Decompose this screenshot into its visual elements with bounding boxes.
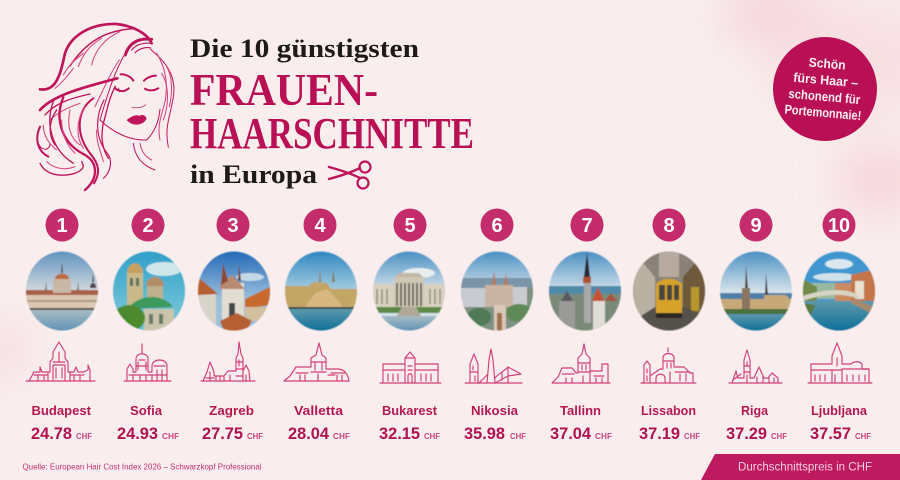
city label: Ljubljana: CHF <box>855 432 871 441</box>
photo: Riga <box>720 251 792 331</box>
skyline: Ljubljana <box>808 343 872 383</box>
city label: Bukarest: Bukarest <box>382 403 438 418</box>
callout bubble: schonend für <box>788 86 861 107</box>
city label: Tallinn <box>550 403 612 443</box>
city label: Ljubljana <box>810 403 871 443</box>
rank badge row: 2 <box>142 215 154 237</box>
city label: Bukarest: CHF <box>424 432 440 441</box>
city label: Riga <box>726 403 787 443</box>
skyline: Riga <box>729 350 782 383</box>
city label: Riga: CHF <box>771 432 787 441</box>
skyline: Budapest <box>26 342 95 381</box>
city label: Nikosia <box>464 403 526 443</box>
photo: Tallinn <box>549 251 621 331</box>
city label: Valletta: CHF <box>333 432 350 441</box>
city label: Lissabon: 37.19 <box>639 424 680 443</box>
city label: Budapest: Budapest <box>32 403 92 418</box>
skyline: Nikosia <box>465 349 522 383</box>
rank badge row <box>46 208 856 242</box>
icon: woman with flowing hair <box>37 22 177 192</box>
skyline: Zagreb <box>201 342 255 381</box>
city label: Nikosia: CHF <box>510 432 526 441</box>
city label: Ljubljana: Ljubljana <box>811 403 868 418</box>
title line 2: FRAUEN- <box>190 64 378 115</box>
title <box>190 34 474 189</box>
rank badge row: 5 <box>404 215 416 237</box>
photo: Nikosia <box>461 251 533 331</box>
city label: Bukarest <box>379 403 440 443</box>
photo: Lissabon <box>633 251 705 331</box>
city label: Budapest: 24.78 <box>31 424 72 443</box>
skyline: Bukarest <box>380 352 441 383</box>
photo: Budapest <box>26 251 98 331</box>
city label: Tallinn: Tallinn <box>560 403 601 418</box>
city label: Tallinn: CHF <box>595 432 612 441</box>
footer ribbon <box>701 454 900 480</box>
rank badge row: 9 <box>750 215 762 237</box>
photo: Ljubljana <box>803 251 875 331</box>
rank badge row: 7 <box>581 215 593 237</box>
city label: Ljubljana: 37.57 <box>810 424 851 443</box>
city label: Budapest: CHF <box>76 432 92 441</box>
skyline: Sofia <box>124 344 171 381</box>
rank badge row: 3 <box>227 215 239 237</box>
title line 3: HAARSCHNITTE <box>190 109 474 158</box>
city label: Budapest <box>31 403 92 443</box>
city label: Sofia: Sofia <box>130 403 163 418</box>
city label: Zagreb: 27.75 <box>202 424 243 443</box>
city label: Valletta <box>288 403 350 443</box>
callout bubble: Schön <box>808 55 846 73</box>
rank badge row: 8 <box>663 215 675 237</box>
footer ribbon: Durchschnittspreis in CHF <box>738 462 872 474</box>
city label: Lissabon: Lissabon <box>641 403 696 418</box>
rank badge row: 4 <box>314 215 326 237</box>
city label: Zagreb: Zagreb <box>209 403 254 418</box>
rank badge row: 10 <box>828 215 850 237</box>
skyline: Valletta <box>284 343 349 381</box>
callout bubble: fürs Haar – <box>793 70 859 90</box>
city label: Riga: Riga <box>741 403 769 418</box>
city label: Nikosia: Nikosia <box>471 403 519 418</box>
callout bubble <box>773 37 877 141</box>
city label: Lissabon: CHF <box>684 432 700 441</box>
title line 4: in Europa <box>190 160 317 189</box>
city label: Zagreb <box>202 403 263 443</box>
photo: Valletta <box>285 251 357 331</box>
photo: Bukarest <box>373 251 445 331</box>
city label: Lissabon <box>639 403 700 443</box>
city label: Sofia <box>117 403 179 443</box>
city label: Bukarest: 32.15 <box>379 424 420 443</box>
city label: Sofia: CHF <box>162 432 179 441</box>
title line 1: Die 10 günstigsten <box>190 34 420 63</box>
city label: Sofia: 24.93 <box>117 424 158 443</box>
city label: Zagreb: CHF <box>247 432 263 441</box>
skyline: Tallinn <box>552 344 610 383</box>
rank badge row: 1 <box>56 215 68 237</box>
callout bubble: Portemonnaie! <box>784 102 862 123</box>
city label: Valletta: 28.04 <box>288 424 330 443</box>
city label: Nikosia: 35.98 <box>464 424 505 443</box>
skyline: Lissabon <box>641 348 696 383</box>
photo: Sofia <box>113 251 185 331</box>
icon: scissors <box>329 162 370 188</box>
city label: Valletta: Valletta <box>294 403 344 418</box>
city label: Tallinn: 37.04 <box>550 424 592 443</box>
rank badge row: 6 <box>491 215 503 237</box>
city label: Riga: 37.29 <box>726 424 767 443</box>
source note: Quelle: European Hair Cost Index 2026 – Schwarzkopf Professional <box>22 462 262 472</box>
photo: Zagreb <box>198 251 270 331</box>
